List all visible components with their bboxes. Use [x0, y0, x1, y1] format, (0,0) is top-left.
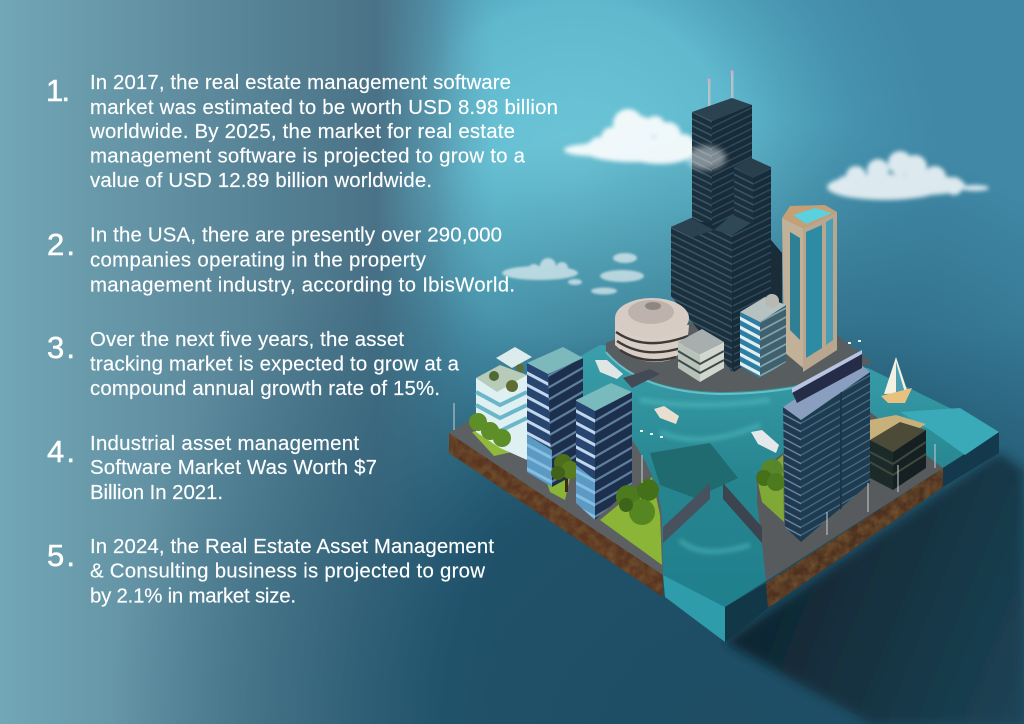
- text 4: [90, 433, 377, 504]
- stat 4: [47, 433, 377, 504]
- small white building: [678, 329, 724, 382]
- submerged shadow: [650, 443, 738, 498]
- yacht right: [751, 430, 779, 453]
- main tower: [671, 70, 782, 372]
- bridge right: [723, 483, 762, 543]
- text 1: value of USD 12.89 billion worldwide.: [90, 170, 432, 192]
- text 3: Over the next five years, the asset: [90, 329, 404, 351]
- grass left: [472, 428, 512, 456]
- text 5: [90, 536, 494, 608]
- soil left: [449, 433, 663, 597]
- text 4: Software Market Was Worth $7: [90, 457, 377, 479]
- cloud: small middle: [502, 253, 644, 294]
- text 2: management industry, according to IbisWorld.: [90, 275, 515, 297]
- text 1: worldwide. By 2025, the market for real estate: [89, 121, 515, 143]
- dark building: [870, 415, 926, 490]
- right big tower: [783, 350, 870, 542]
- street lamps: [454, 403, 935, 535]
- lower right face: [732, 223, 771, 372]
- right trees: [756, 459, 785, 491]
- bridge upper: [623, 369, 660, 388]
- striped mid building: [740, 294, 786, 378]
- text 4: Industrial asset management: [90, 433, 359, 455]
- text 3: compound annual growth rate of 15%.: [90, 378, 440, 400]
- stat 1: [46, 72, 558, 192]
- island: [606, 320, 872, 392]
- text 1: [89, 72, 558, 192]
- text 1: market was estimated to be worth USD 8.98 billion: [90, 97, 558, 119]
- tall pool tower: [782, 205, 837, 372]
- water highlight far right: [900, 408, 999, 455]
- land right: [757, 412, 943, 581]
- trees center: [616, 479, 659, 525]
- lower left face: [671, 227, 732, 372]
- platform shadow: [725, 453, 1024, 724]
- number 1: 1.: [46, 73, 70, 108]
- text 5: In 2024, the Real Estate Asset Management: [90, 536, 494, 558]
- island shoreline: [606, 352, 850, 394]
- water cut face right: [725, 583, 768, 642]
- isometric city island: [449, 70, 999, 642]
- top section: [692, 112, 712, 222]
- bridge left: [663, 483, 710, 543]
- water cut face far right: [943, 432, 999, 487]
- tower backing: [671, 105, 782, 372]
- text 2: companies operating in the property: [90, 250, 427, 272]
- soil right: [766, 468, 943, 608]
- water streaks: [640, 400, 985, 551]
- stat 5: [47, 536, 494, 608]
- stepped white building: [476, 347, 532, 460]
- text 1: management software is projected to grow to a: [90, 146, 526, 168]
- sailboat: [881, 357, 912, 403]
- trees left: [469, 413, 511, 447]
- text 2: [90, 225, 515, 297]
- blue tower two: [576, 383, 632, 520]
- water cut face left: [663, 575, 725, 642]
- grass right: [757, 455, 784, 522]
- text 3: [90, 329, 460, 400]
- cloud: upper right: [827, 151, 989, 200]
- text 2: In the USA, there are presently over 290,000: [90, 225, 502, 247]
- tree between towers: [551, 454, 579, 492]
- water surface: [477, 345, 999, 607]
- right step: [771, 247, 782, 340]
- lower caps: [671, 218, 714, 237]
- number 5: 5.: [47, 538, 75, 573]
- number 3: 3.: [47, 330, 75, 365]
- text 4: Billion In 2021.: [90, 482, 223, 504]
- number 2: 2.: [47, 227, 75, 262]
- text 5: by 2.1% in market size.: [90, 586, 296, 608]
- land left: [449, 414, 663, 575]
- round building: [615, 298, 689, 362]
- stat 2: [47, 225, 515, 297]
- cloud: upper left: [564, 109, 695, 164]
- blue tower one: [527, 347, 583, 487]
- text 5: & Consulting business is projected to grow: [90, 561, 485, 583]
- text 1: In 2017, the real estate management software: [90, 72, 511, 94]
- birds: [640, 340, 861, 438]
- number 4: 4.: [47, 434, 75, 469]
- grass center: [600, 477, 662, 565]
- middle right section: [734, 167, 753, 240]
- yacht upper: [595, 360, 623, 379]
- yacht center: [654, 406, 679, 424]
- antennas: [707, 70, 734, 120]
- stat 3: [47, 329, 460, 400]
- text 3: tracking market is expected to grow at a: [90, 354, 460, 376]
- cloud across tower: [686, 146, 726, 170]
